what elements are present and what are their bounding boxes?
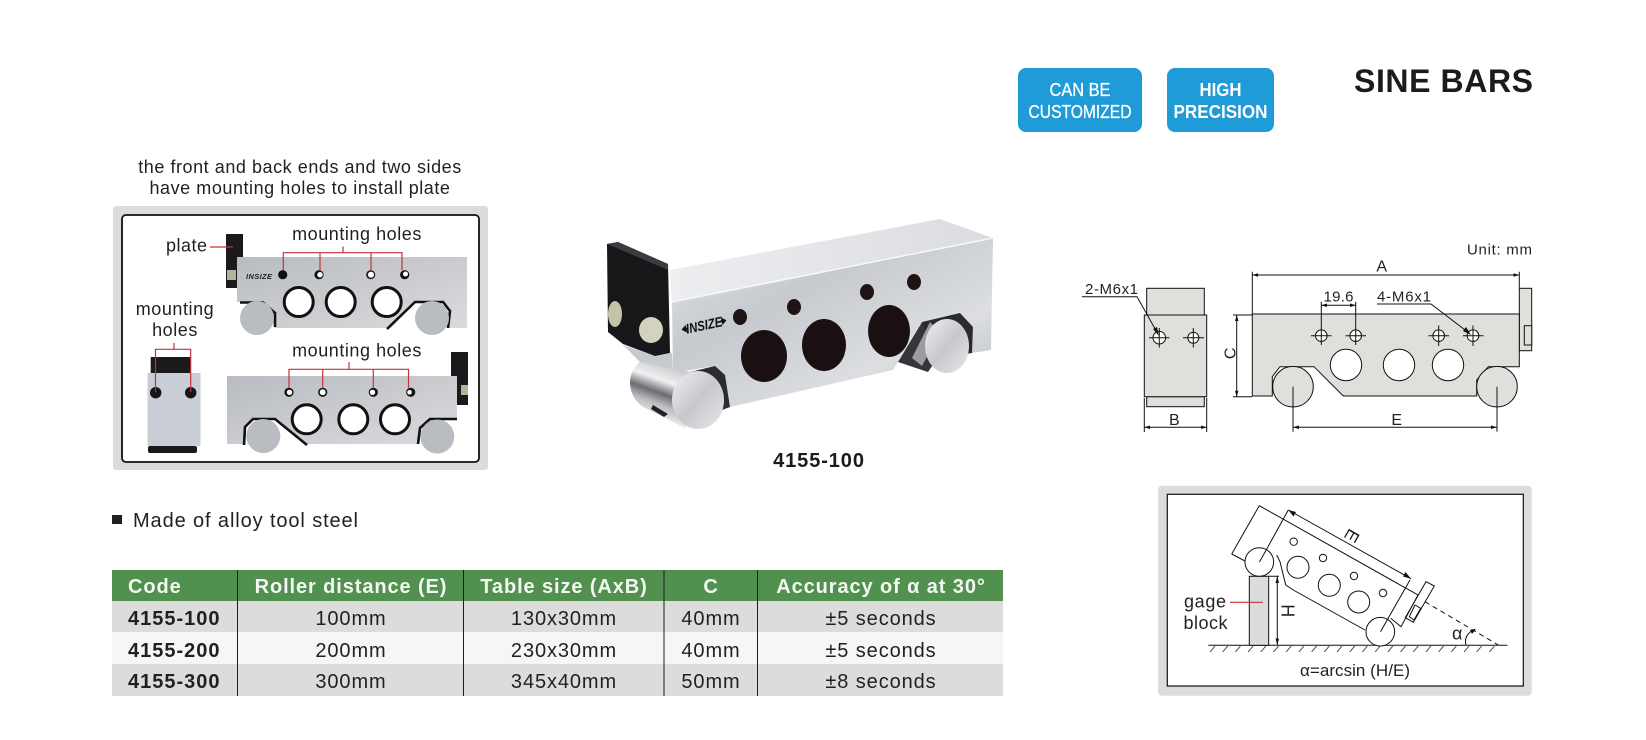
product code label: 4155-100 [773,450,865,472]
callout: upper mounting holes: mounting holes [292,224,422,244]
label: 2-M6x1 [1082,281,1159,336]
callout: upper mounting holes [283,224,422,270]
row 4155-200: 230x30mm [511,640,617,662]
badge: can be customized [1018,68,1142,132]
front face of bar [672,238,993,407]
dimension: A: A [1376,259,1387,276]
logo: INSIZE [684,313,724,337]
panel: mounting holes views [113,206,488,470]
small holes [733,274,921,325]
steel under plate [623,345,673,373]
table header: Code [128,576,182,598]
callout: gage block [1184,591,1263,633]
formula: α=arcsin (H/E) [1300,661,1410,680]
callout: gage block: gage [1184,591,1226,611]
row 4155-100: 40mm [681,608,741,630]
dimension: 19.6 [1321,289,1356,345]
callout: end mounting holes [136,299,214,392]
dimension: E on tilted bar: E [1340,526,1364,546]
view: top bar with plate [226,234,467,335]
caption: mounting plate note: the front and back ends and two sides [138,157,462,177]
row 4155-100: 130x30mm [511,608,617,630]
mounting plate [607,242,670,356]
gage block [1249,576,1269,645]
dimension: E on tilted bar [1288,510,1411,579]
badge: can be customized: CUSTOMIZED [1028,102,1132,122]
dimension: 19.6: 19.6 [1324,289,1354,306]
angle alpha: α [1452,624,1462,644]
view: end face [148,357,200,453]
callout: end mounting holes: holes [152,320,198,340]
dimension: E [1293,387,1497,432]
label: 2-M6x1: 2-M6x1 [1085,281,1138,298]
dimension: B: B [1169,412,1180,429]
row 4155-300: 50mm [681,671,741,693]
top face of bar [670,219,993,302]
badge: high precision: HIGH [1200,80,1242,100]
table header [112,570,1003,601]
label: 4-M6x1 [1377,289,1471,335]
badge: high precision [1167,68,1274,132]
dimension: E: E [1391,412,1402,429]
row 4155-100 [112,601,1003,632]
badge: high precision: PRECISION [1174,102,1268,122]
ground [1208,645,1507,652]
row 4155-200: ±5 seconds [825,640,937,662]
drawing: side view [1223,259,1532,432]
caption: mounting plate note: have mounting holes to install plate [150,178,450,198]
dimension: H [1269,576,1297,645]
tilted sine bar [1232,506,1434,646]
badge: can be customized: CAN BE [1050,80,1110,100]
right roller [898,322,950,372]
row 4155-200: 40mm [681,640,741,662]
right roller recess and cap [912,313,973,373]
large holes [1330,349,1464,381]
view: lower bar with plate [227,352,468,454]
view: top bar with plate: INSIZE [246,272,273,281]
row 4155-300: 345x40mm [511,671,617,693]
large holes [741,305,910,382]
specification table [112,570,1003,696]
feature bullet: Made of alloy tool steel [133,510,358,532]
row 4155-200: 4155-200 [128,640,221,662]
callout: lower mounting holes [289,341,422,388]
table header: Table size (AxB) [480,576,648,598]
unit note: Unit: mm [1467,242,1532,259]
row 4155-200: 200mm [315,640,387,662]
product photo: sine bar 4155-100 [607,219,993,429]
callout: end mounting holes: mounting [136,299,214,319]
row 4155-100: 4155-100 [128,608,221,630]
threaded holes [1311,326,1484,346]
table header: C [703,576,719,598]
row 4155-300: ±8 seconds [825,671,937,693]
callout: plate [166,236,233,256]
dimension: H: H [1277,604,1297,617]
row 4155-100: 100mm [315,608,387,630]
angle alpha [1425,602,1498,645]
table header: Roller distance (E) [255,576,447,598]
row 4155-300: 300mm [315,671,387,693]
row 4155-100: ±5 seconds [825,608,937,630]
drawing: end view [1082,281,1207,432]
dimension: C: C [1223,348,1240,359]
panel: gage block setup diagram [1158,486,1532,696]
caption: mounting plate note [138,157,462,198]
callout: lower mounting holes: mounting holes [292,341,422,361]
dimension: A [1252,259,1519,314]
dimension: B [1144,398,1207,432]
label: 4-M6x1: 4-M6x1 [1377,289,1431,306]
row 4155-300 [112,664,1003,696]
row 4155-200 [112,632,1003,664]
title: SINE BARS [1354,63,1533,99]
bar top edge highlight [672,238,993,302]
callout: plate: plate [166,236,208,256]
callout: gage block: block [1184,613,1228,633]
row 4155-300: 4155-300 [128,671,221,693]
dimension: C [1223,315,1252,397]
table header: Accuracy of α at 30° [776,576,986,598]
left roller [630,362,730,429]
